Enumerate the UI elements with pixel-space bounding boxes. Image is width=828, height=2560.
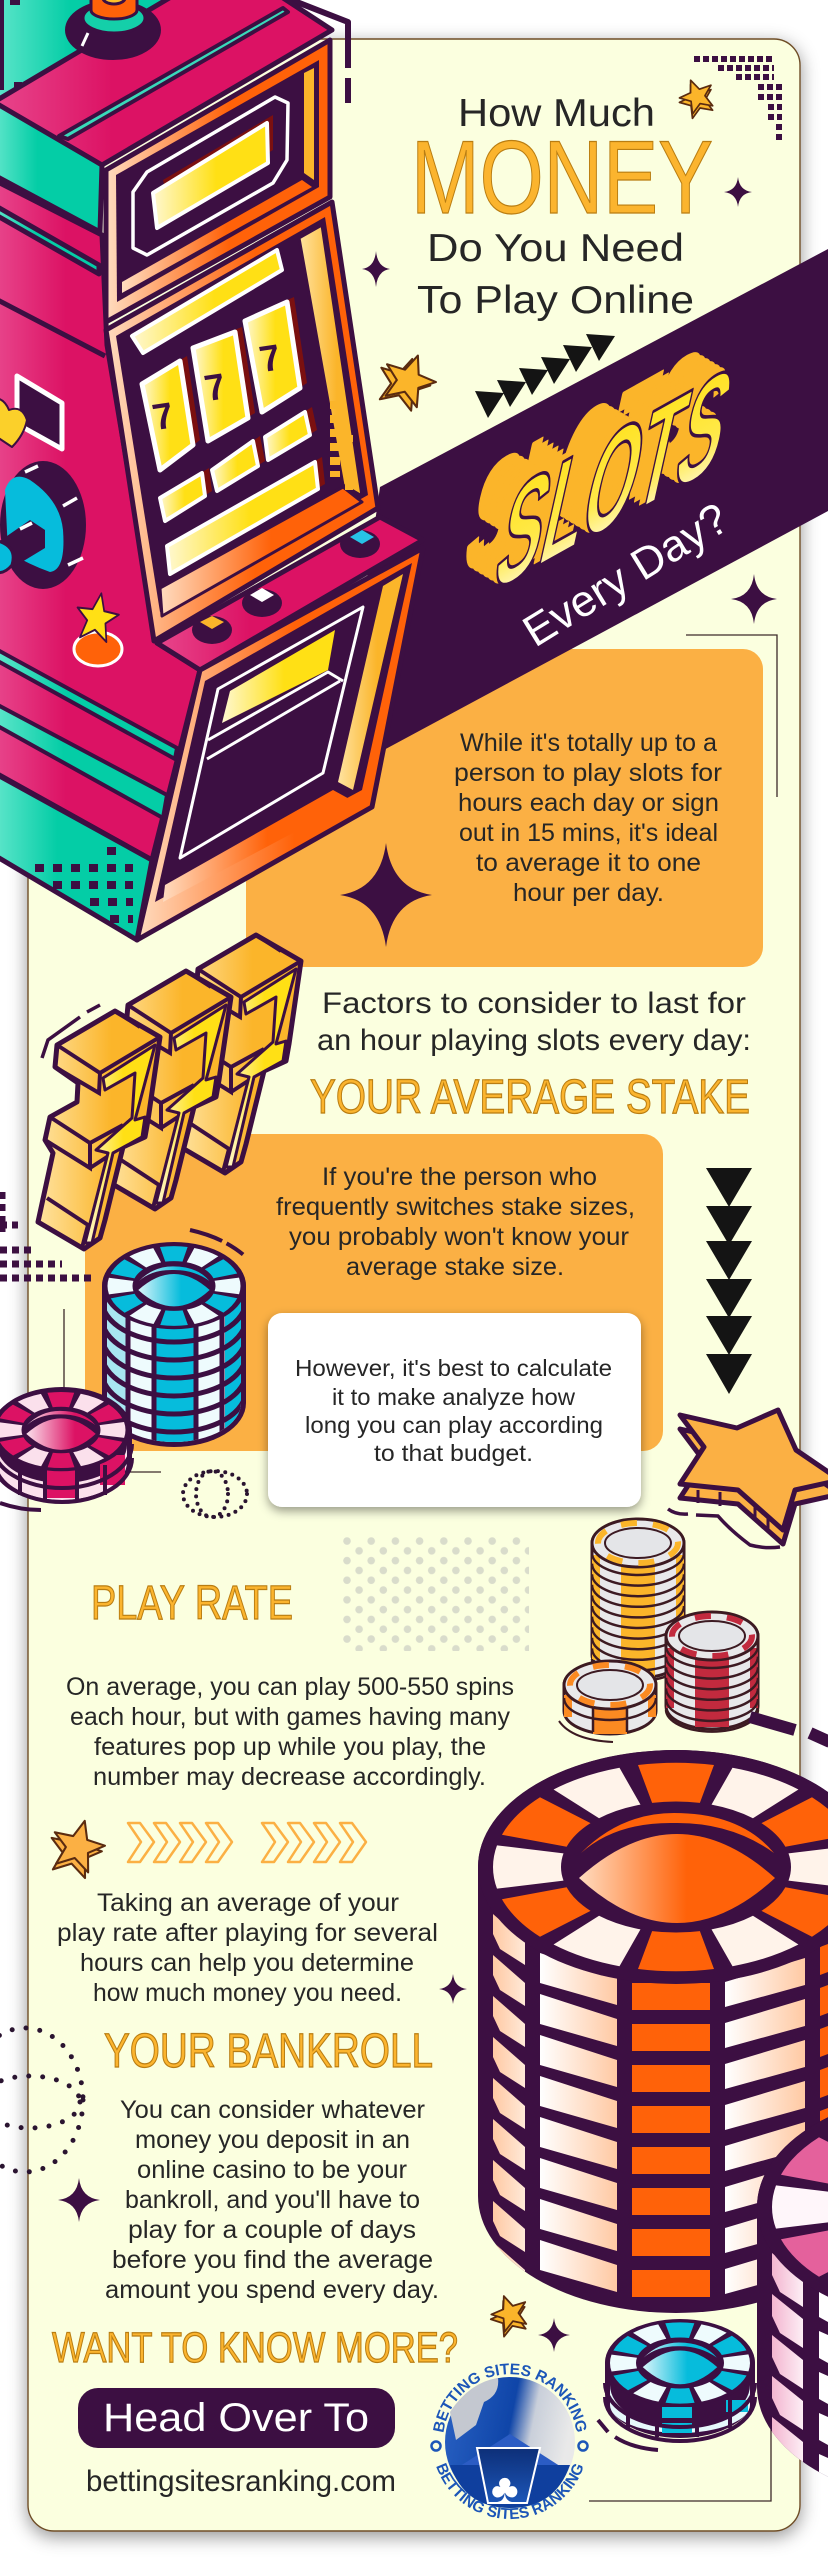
SLOTS 3D lettering <box>453 314 746 626</box>
text: website: bettingsitesranking.com <box>86 2465 396 2498</box>
first seven <box>38 1011 160 1249</box>
machine: side dots <box>335 401 349 494</box>
machine: dial <box>0 461 86 589</box>
top ring <box>102 1243 246 1329</box>
arc dash <box>190 1230 258 1270</box>
machine: upper side strip <box>0 205 99 274</box>
text: intro paragraph <box>454 729 722 907</box>
title: money: MONEY <box>411 120 713 236</box>
machine: yellow heart <box>0 398 27 447</box>
machine: yellow star <box>72 590 122 643</box>
text: play rate paragraph: On average, you can play 500-550 spins <box>66 1673 514 1701</box>
text: intro paragraph: out in 15 mins, it's ideal <box>459 819 718 847</box>
extrusion gold <box>453 314 741 623</box>
machine: upper screen frame <box>106 40 330 322</box>
text: factors: Factors to consider to last for <box>322 987 746 1020</box>
text: intro paragraph: hour per day. <box>513 879 664 907</box>
machine: teal upper side <box>0 99 102 232</box>
machine: teal top <box>0 0 186 102</box>
text: bankroll paragraph: amount you spend every day. <box>105 2276 439 2304</box>
chip stack: big orange <box>478 1750 828 2313</box>
logo: betting sites ranking: BETTING SITES RANKING <box>433 2363 586 2432</box>
machine: lower side strips <box>0 648 177 940</box>
text: average play rate paragraph: Taking an average of your <box>97 1889 399 1917</box>
banner text: every day: Every Day? <box>515 494 737 657</box>
text: average stake paragraph: average stake size. <box>346 1253 564 1281</box>
dots: top right corner <box>694 59 782 137</box>
title: do you need: Do You Need <box>427 227 684 270</box>
text: bankroll paragraph: bankroll, and you'll have to <box>125 2186 420 2214</box>
machine: base top <box>157 517 423 670</box>
sparkles <box>58 177 777 2352</box>
dotted rings <box>183 1471 247 1517</box>
arrows: diagonal black triangles <box>475 334 615 418</box>
text: play rate paragraph: number may decrease accordingly. <box>93 1763 486 1791</box>
button: head over to <box>78 2388 395 2448</box>
title: to play online: To Play Online <box>417 279 694 322</box>
text: bankroll paragraph <box>105 2096 439 2304</box>
title <box>411 92 713 322</box>
machine: top knob <box>66 0 160 59</box>
machine: square frame <box>17 376 62 449</box>
text: intro paragraph: person to play slots for <box>454 759 722 787</box>
machine: left side body <box>0 180 200 860</box>
machine: door window <box>180 607 363 858</box>
dotted circles left <box>0 2028 83 2172</box>
top ring <box>478 1750 828 1984</box>
text: average play rate paragraph: how much money you need. <box>93 1979 402 2007</box>
white callout card <box>268 1313 641 1507</box>
machine: reel sevens: 7 <box>201 366 230 409</box>
text: average play rate paragraph <box>57 1889 438 2007</box>
text: play rate paragraph: features pop up while you play, the <box>94 1733 486 1761</box>
text: average play rate paragraph: play rate after playing for several <box>57 1919 438 1947</box>
chip stack: red <box>666 1612 758 1732</box>
dots: left staircase <box>0 1192 92 1278</box>
heading: your bankroll: YOUR BANKROLL <box>104 2025 433 2078</box>
machine: side line <box>0 298 105 356</box>
dotted pattern <box>343 1537 529 1651</box>
button: head over to: Head Over To <box>103 2396 369 2440</box>
star: small near heading <box>485 2290 534 2339</box>
crescent <box>581 1813 774 1853</box>
text: bankroll paragraph: money you deposit in an <box>135 2126 410 2154</box>
third seven <box>179 935 301 1173</box>
motion marks <box>668 1509 780 1548</box>
center eye <box>138 1266 210 1306</box>
motion dashes <box>42 1005 100 1058</box>
text: average stake paragraph: If you're the person who <box>322 1163 597 1191</box>
machine: main panel <box>106 202 378 641</box>
chip stack: big pink <box>757 2117 828 2477</box>
logo: betting sites ranking: BETTING SITES RANKING <box>436 2462 583 2520</box>
machine: base buttons <box>192 530 380 644</box>
extrusion outline <box>453 314 732 618</box>
chip: small orange <box>559 1661 656 1742</box>
panel: average stake orange box <box>85 1134 663 1451</box>
second seven <box>109 971 231 1209</box>
logo: lower band <box>450 2465 570 2508</box>
chip stack: gold <box>592 1519 684 1681</box>
machine: bottom dots <box>35 851 133 919</box>
machine: reel sevens <box>149 337 285 438</box>
machine: top bar light <box>132 250 282 353</box>
text: intro paragraph: While it's totally up to a <box>460 729 717 757</box>
machine: top yellow display <box>153 123 268 228</box>
machine: reel sevens: 7 <box>149 395 178 438</box>
text: bankroll paragraph: You can consider whatever <box>120 2096 425 2124</box>
star: top right <box>673 74 720 121</box>
star: left of arrows <box>371 345 442 415</box>
arrows: vertical black triangles <box>706 1168 752 1394</box>
machine: reel shadows <box>149 297 325 569</box>
machine: dashed corners <box>1 0 348 103</box>
heading: want to know more: WANT TO KNOW MORE? <box>52 2324 458 2372</box>
logo: shield <box>477 2448 540 2503</box>
machine: reels <box>142 302 300 470</box>
text: callout <box>295 1355 612 1466</box>
text: play rate paragraph <box>66 1673 514 1791</box>
star: small beside chevrons <box>44 1814 110 1881</box>
motion arc <box>559 1721 613 1742</box>
logo: betting sites ranking <box>430 2363 589 2520</box>
text: bankroll paragraph: play for a couple of days <box>128 2216 416 2244</box>
text: factors <box>317 987 751 1057</box>
center eye <box>643 2342 717 2384</box>
machine: buttons <box>160 412 318 574</box>
machine: reel sevens: 7 <box>256 337 285 380</box>
motion arc <box>0 1503 41 1510</box>
chip: pink <box>0 1387 132 1510</box>
text: play rate paragraph: each hour, but with games having many <box>70 1703 510 1731</box>
banner: diagonal purple band <box>340 249 828 770</box>
icon: 777 blocks <box>38 935 301 1249</box>
text: callout: it to make analyze how <box>332 1384 575 1410</box>
machine: ring under star <box>74 632 122 666</box>
title: how much: How Much <box>458 92 655 135</box>
panel: intro orange box <box>246 649 763 967</box>
heading: play rate: PLAY RATE <box>91 1577 293 1630</box>
big orange star <box>668 1410 828 1548</box>
slot machine <box>0 0 423 940</box>
machine: hood strip <box>59 8 288 139</box>
logo: house <box>454 2434 566 2496</box>
text: callout: However, it's best to calculate <box>295 1355 612 1381</box>
text: callout: long you can play according <box>305 1412 603 1438</box>
machine: door frame <box>137 548 423 940</box>
motion arc <box>598 2420 658 2450</box>
text: average stake paragraph: you probably won't know your <box>289 1223 629 1251</box>
text: bankroll paragraph: online casino to be your <box>137 2156 407 2184</box>
text: bankroll paragraph: before you find the average <box>112 2246 433 2274</box>
text: intro paragraph: to average it to one <box>476 849 701 877</box>
decorative thin line frame <box>686 635 777 797</box>
dashes above big chip <box>750 1717 828 1742</box>
chip stack: blue <box>100 1230 258 1451</box>
logo: betting sites ranking: ♣ <box>491 2465 519 2512</box>
logo: land masses <box>450 2378 498 2440</box>
machine: hood <box>0 0 332 165</box>
text: factors: an hour playing slots every day: <box>317 1024 751 1057</box>
text: average stake paragraph: frequently switches stake sizes, <box>276 1193 635 1221</box>
text: intro paragraph: hours each day or sign <box>458 789 719 817</box>
center eye <box>26 1411 96 1450</box>
logo: globe <box>445 2377 575 2507</box>
text: average stake paragraph <box>276 1163 635 1281</box>
text: average play rate paragraph: hours can help you determine <box>80 1949 414 1977</box>
sparkle: big on orange panel <box>340 843 432 947</box>
chip: small blue bottom <box>598 2319 755 2450</box>
center eye <box>579 1834 775 1923</box>
chevrons <box>128 1823 366 1862</box>
text: callout: to that budget. <box>374 1440 533 1466</box>
